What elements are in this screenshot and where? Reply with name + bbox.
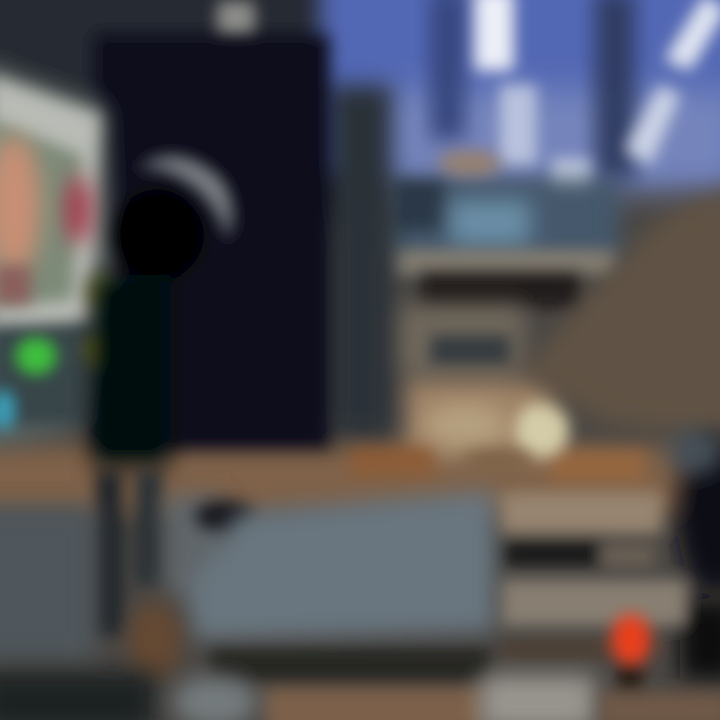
left monitor bbox=[0, 60, 119, 450]
background wall and window bbox=[0, 0, 720, 235]
keyboard shadow bbox=[210, 648, 490, 682]
keyboard bbox=[185, 490, 495, 640]
brown furry shape at right bbox=[520, 190, 720, 440]
microphone with stand bbox=[92, 157, 232, 635]
dark object at right bbox=[667, 430, 720, 680]
lower left desk mat bbox=[0, 495, 255, 660]
right desk stripes bbox=[500, 492, 687, 660]
desk surface bbox=[0, 380, 720, 515]
shelf and mid background bbox=[390, 150, 620, 375]
dark tower bbox=[95, 35, 330, 450]
cup or cream objects bbox=[423, 403, 569, 468]
tower side panel bbox=[330, 85, 392, 435]
red object bbox=[611, 614, 651, 690]
bottom foreground bbox=[0, 602, 720, 720]
